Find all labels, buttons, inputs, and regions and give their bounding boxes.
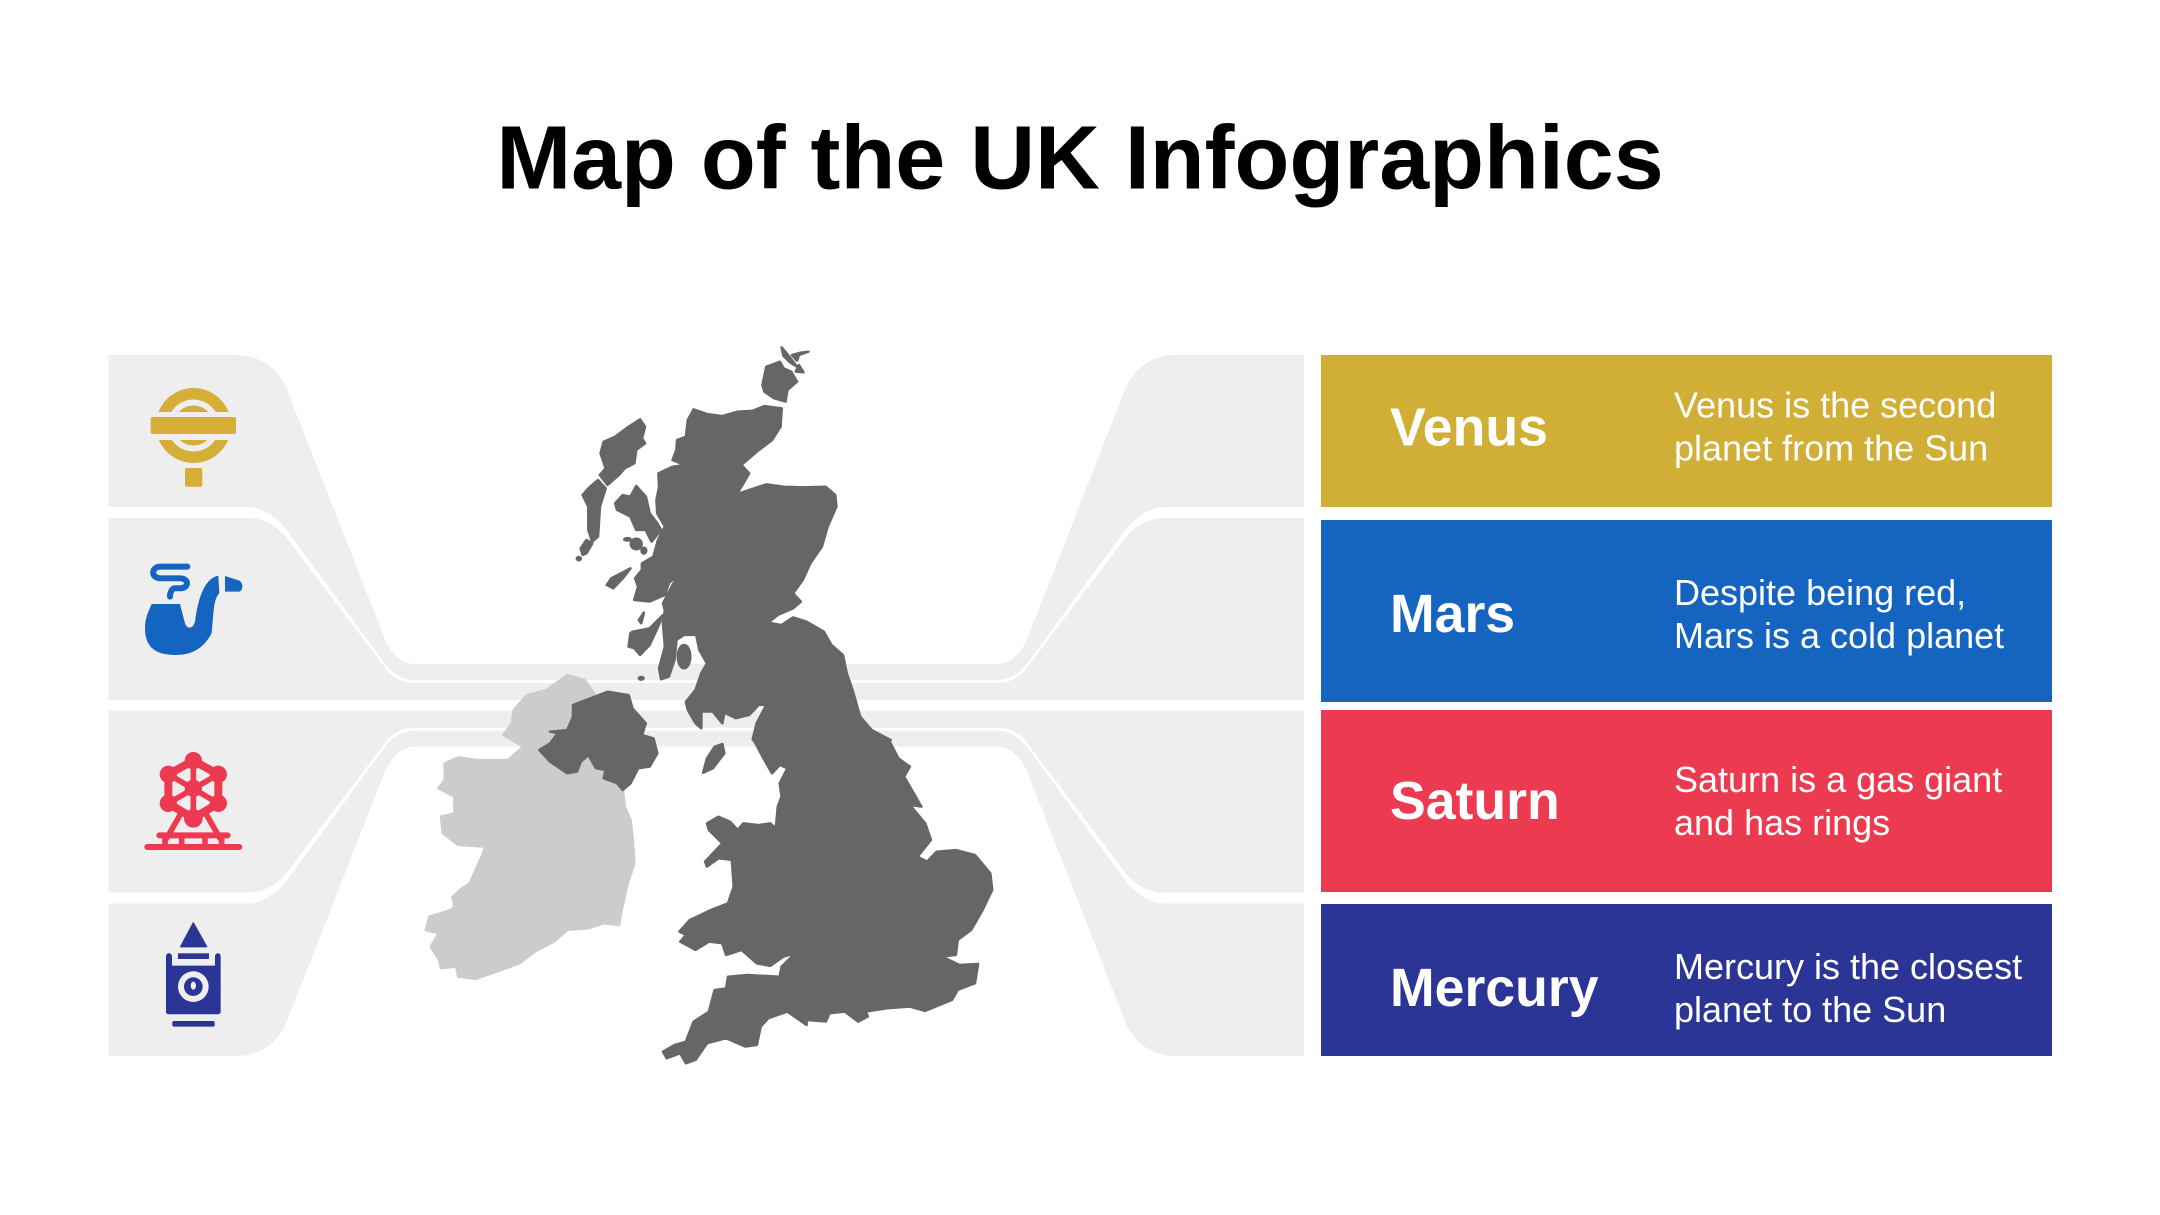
- map: Scotland and islands: [577, 347, 891, 740]
- card: Saturn: and has rings: [1674, 802, 1890, 843]
- card: Venus: Venus: [1390, 398, 1548, 458]
- card: Mercury: [1321, 904, 2052, 1056]
- map: British Isles: [426, 347, 992, 1063]
- card: Saturn: Saturn: [1390, 771, 1560, 831]
- card: Mars: Mars is a cold planet: [1674, 615, 2004, 656]
- map: Northern Ireland: [539, 692, 657, 790]
- card: Mercury: planet to the Sun: [1674, 989, 1946, 1030]
- card: Saturn: [1321, 710, 2052, 892]
- icon: Big Ben clock tower: [166, 923, 221, 1027]
- card: Venus: [1321, 355, 2052, 507]
- icon: Atomium: [147, 752, 239, 847]
- map: Ireland: [426, 675, 634, 979]
- map: England and Wales: [663, 680, 992, 1063]
- card: Saturn: Saturn is a gas giant: [1674, 759, 2002, 800]
- card: Mercury: Mercury is the closest: [1674, 946, 2022, 987]
- title: Map of the UK Infographics: [496, 108, 1664, 208]
- card: Mars: [1321, 520, 2052, 702]
- card: Mars: Despite being red,: [1674, 572, 1966, 613]
- icon: underground roundel: [150, 388, 238, 487]
- card: Mars: Mars: [1390, 584, 1515, 644]
- icon: smoking pipe: [145, 567, 242, 655]
- panel: grey funnel bands: [108, 355, 1304, 1056]
- card: Mercury: Mercury: [1390, 958, 1599, 1018]
- card: Venus: planet from the Sun: [1674, 428, 1988, 468]
- card: Venus: Venus is the second: [1674, 384, 1996, 426]
- map: Isle of Man: [703, 744, 724, 773]
